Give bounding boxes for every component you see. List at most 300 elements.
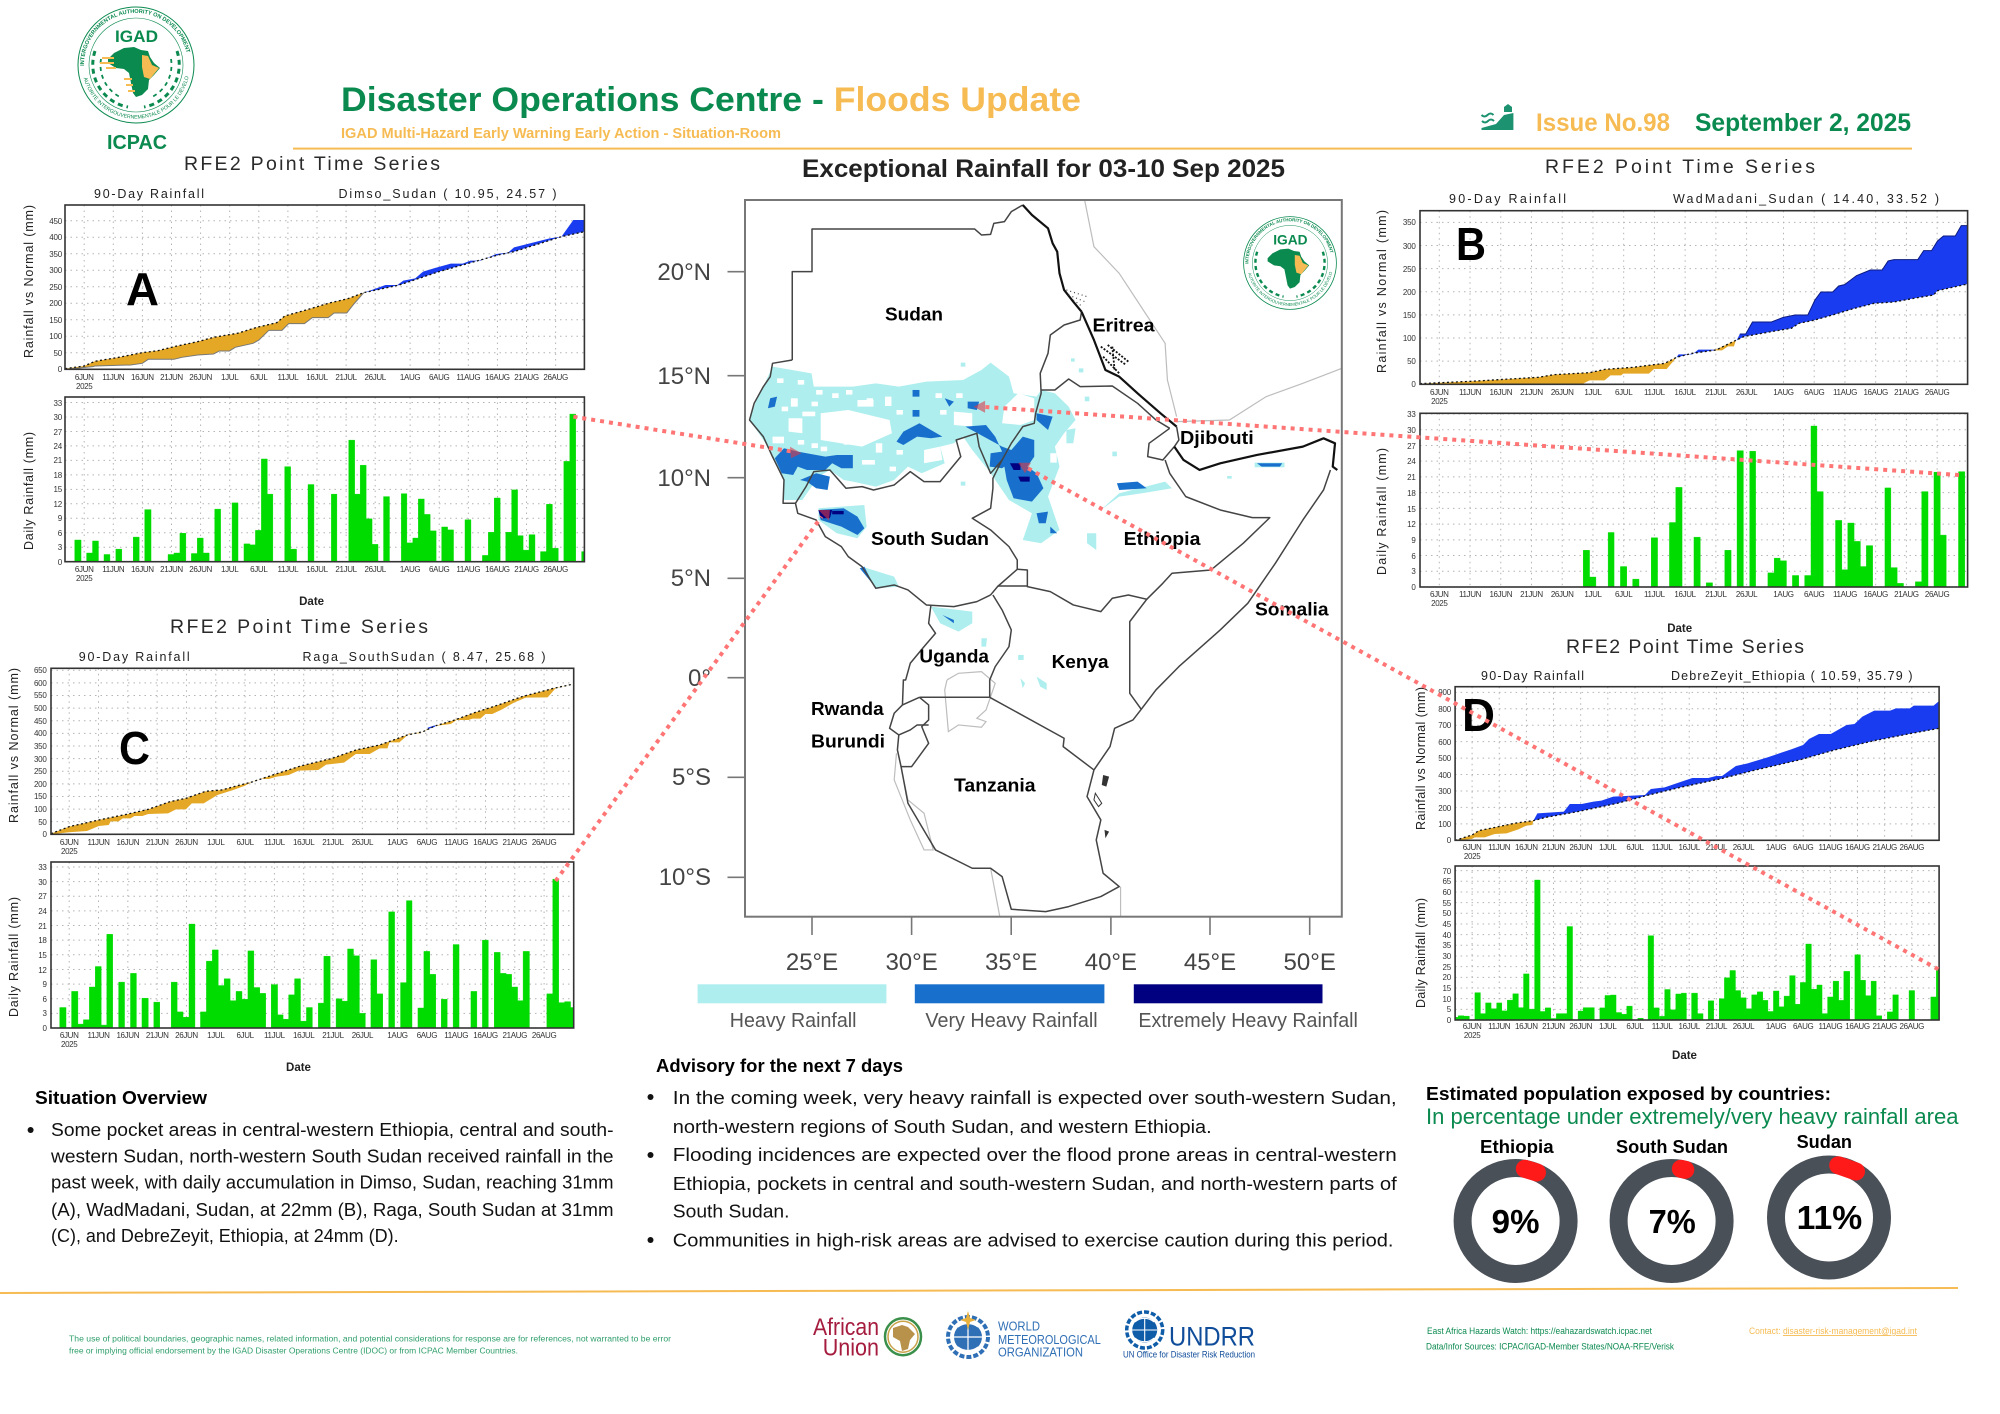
chart B axis labels: 21AUG [1894,590,1919,599]
chart B axis labels: 6JUN [1430,590,1449,599]
chart D title: RFE2 Point Time Series [1566,636,1804,658]
chart C axis labels: 250 [34,767,47,776]
chart D axis labels: 200 [1438,804,1452,813]
chart C axis labels: 16JUL [293,1031,315,1040]
chart D axis labels: 65 [1442,877,1452,886]
map country labels: Djibouti [1180,428,1254,448]
chart A axis labels: 33 [54,399,63,408]
chart D axis labels: 11JUN [1488,843,1511,852]
chart B axis labels: 200 [1403,288,1416,297]
chart A axis labels: 1JUL [221,373,239,382]
chart D axis labels: 11AUG [1818,843,1842,852]
chart B axis labels: 3 [1411,567,1416,576]
title: Disaster Operations Centre - Floods Update [341,81,1081,119]
chart B letter: B [1456,218,1486,270]
map frame and axes: 0° [688,665,711,692]
chart B axis labels: 350 [1403,218,1416,227]
chart D axis labels: 11JUL [1652,843,1673,852]
chart A axis labels: 6AUG [429,373,450,382]
icon: IGAD logo on map: IGAD [1273,233,1308,248]
chart B axis labels: 11AUG [1833,388,1857,397]
chart C axis labels: 16JUN [116,838,140,847]
chart C axis labels: 26AUG [532,838,556,847]
chart C axis labels: 12 [38,966,47,975]
chart A axis labels: 150 [49,316,63,325]
chart A axis labels: 26AUG [543,373,568,382]
chart A axis labels: 21 [54,456,63,465]
chart A axis labels: 6AUG [429,565,450,574]
chart A axis labels: 26JUN [189,373,213,382]
chart D axis labels: 6JUN [1463,843,1482,852]
map country labels: Somalia [1255,600,1330,620]
chart A axis labels: 11JUN [102,565,125,574]
chart C axis labels: 18 [38,936,47,945]
text block: advisory [648,1056,1398,1251]
chart C axis labels: 500 [34,704,47,713]
chart A axis labels: 6 [58,529,63,538]
chart C axis labels: 1AUG [387,1031,408,1040]
map legend: Heavy Rainfall [730,1010,856,1032]
chart D axis labels: 6JUL [1626,843,1645,852]
chart D axis labels: 16JUL [1679,1022,1701,1031]
chart B axis labels: 2025 [1431,397,1448,406]
chart C upper cumulative chart [51,668,574,834]
situation bullet [28,1127,34,1133]
chart C axis labels: 6AUG [417,838,437,847]
advisory heading: Advisory for the next 7 days [656,1056,903,1076]
chart B axis labels: 6AUG [1804,590,1825,599]
chart B axis labels: 26JUL [1736,388,1758,397]
chart C lower daily bars [51,862,574,1028]
chart A axis labels: 16JUL [306,565,329,574]
chart D axis labels: 500 [1438,754,1452,763]
chart B axis labels: 21AUG [1894,388,1919,397]
chart C axis labels: 11JUL [264,1031,286,1040]
chart D axis labels: 2025 [1464,852,1481,861]
chart C axis labels: 350 [34,742,47,751]
chart C axis labels: 1JUL [207,1031,225,1040]
situation text: (C), and DebreZeyit, Ethiopia, at 24mm (D). [51,1226,399,1246]
chart B axis labels: 21 [1407,473,1416,482]
situation text: Some pocket areas in central-western Ethiopia, central and south- [51,1120,614,1140]
advisory text: In the coming week, very heavy rainfall is expected over south-western Sudan, [673,1088,1397,1108]
chart B axis labels: 11JUL [1644,590,1666,599]
chart C axis labels: 2025 [61,847,78,856]
chart C axis labels: 0 [42,830,47,839]
chart A axis labels: 11AUG [456,373,480,382]
issue number: Issue No.98 [1536,109,1670,137]
chart D axis labels: 21JUL [1706,843,1728,852]
chart B axis labels: 26JUN [1551,388,1574,397]
chart C axis labels: 16JUN [116,1031,140,1040]
chart C axis labels: 100 [34,805,47,814]
map country labels: Eritrea [1092,316,1156,336]
chart B axis labels: 15 [1407,505,1416,514]
chart A axis labels: 0 [58,365,63,374]
chart B axis labels: 21JUL [1705,590,1727,599]
panel: chart B WadMadani Sudan [1375,156,1968,635]
map country labels: Burundi [811,732,885,752]
chart D axis labels: 11JUL [1652,1022,1673,1031]
chart B axis labels: 100 [1403,334,1416,343]
chart C axis labels: 26JUN [175,838,198,847]
icon: IGAD logo [78,6,194,124]
chart A lower daily bars [65,397,584,562]
header rule [293,148,1912,150]
chart C subtitle left: 90-Day Rainfall [79,650,190,664]
chart B axis labels: Date [1667,623,1692,635]
map frame and axes: 5°N [671,565,711,592]
chart A axis labels: 21JUN [160,373,183,382]
donut: Ethiopia 9%: 9% [1492,1203,1540,1240]
chart C axis labels: 27 [38,892,47,901]
chart D axis labels: 35 [1442,941,1452,950]
map frame and axes: 35°E [985,949,1037,976]
chart D axis labels: 16JUN [1515,1022,1538,1031]
chart B axis labels: 18 [1407,489,1416,498]
chart B axis labels: 250 [1403,265,1416,274]
logo: WMO [948,1311,1101,1360]
chart D axis labels: 2025 [1464,1031,1481,1040]
chart B axis labels: 16AUG [1863,388,1888,397]
chart A axis labels: 450 [49,217,63,226]
footer [0,1288,1958,1362]
chart A axis labels: 6JUN [75,373,94,382]
chart B axis labels: 0 [1411,380,1416,389]
ICPAC label: ICPAC [107,132,167,154]
chart B axis labels: 21JUN [1520,590,1543,599]
chart D axis labels: 700 [1438,721,1452,730]
chart C axis labels [7,666,556,1074]
chart D axis labels: 6AUG [1793,843,1814,852]
data sources: Data/Infor Sources: ICPAC/IGAD-Member States/NOAA-RFE/Verisk [1426,1342,1674,1352]
map frame and axes: 30°E [885,949,938,976]
chart B axis labels: 33 [1407,410,1416,419]
chart D axis labels: 0 [1447,1016,1452,1025]
chart A axis labels: 21JUN [160,565,183,574]
chart A axis labels: Rainfall vs Normal (mm) [22,205,36,358]
data sources: East Africa Hazards Watch: https://eahazardswatch.icpac.net [1427,1326,1652,1336]
chart D axis labels: 30 [1442,952,1452,961]
chart C axis labels: 0 [42,1024,47,1033]
chart C axis labels: 50 [38,818,47,827]
map frame and axes: 25°E [786,949,838,976]
chart B axis labels [1375,210,1949,635]
chart D axis labels: 1AUG [1766,843,1786,852]
chart D axis labels: 1JUL [1599,843,1617,852]
map country labels [811,305,1330,796]
chart D axis labels: 40 [1442,931,1452,940]
chart B axis labels: 16JUN [1489,388,1513,397]
chart A axis labels: 0 [58,558,63,567]
chart D axis labels: 900 [1438,688,1452,697]
chart A axis labels: 2025 [76,382,93,391]
chart B axis labels: 6AUG [1804,388,1825,397]
chart C axis labels: 400 [34,729,47,738]
donut: Ethiopia 9%: Ethiopia [1480,1137,1555,1157]
situation text: past week, with daily accumulation in Dimso, Sudan, reaching 31mm [51,1173,614,1193]
chart A axis labels: Daily Rainfall (mm) [22,432,36,550]
chart D axis labels: Daily Rainfall (mm) [1414,898,1428,1008]
text block: situation overview [28,1088,614,1246]
chart C axis labels: 16AUG [473,838,498,847]
logo: WMO: METEOROLOGICAL [998,1333,1101,1347]
chart B axis labels: Daily Rainfall (mm) [1375,448,1389,575]
chart B axis labels: 50 [1407,357,1416,366]
chart C axis labels: 16JUL [293,838,315,847]
chart C axis labels: Daily Rainfall (mm) [7,897,21,1017]
disclaimer: free or implying official endorsement by the IGAD Disaster Operations Centre (IDOC) or from ICPAC Member Countries. [69,1346,518,1356]
chart A axis labels: 21JUL [335,565,358,574]
chart C axis labels: 21AUG [503,1031,527,1040]
chart A axis labels: 26AUG [543,565,568,574]
chart D lower daily bars [1455,866,1939,1020]
map frame and axes: 50°E [1284,949,1336,976]
chart C axis labels: 26AUG [532,1031,556,1040]
chart D station: DebreZeyit_Ethiopia ( 10.59, 35.79 ) [1671,669,1913,683]
chart C axis labels: 3 [42,1009,47,1018]
chart D axis labels: 21AUG [1872,1022,1897,1031]
chart B axis labels: 2025 [1431,599,1448,608]
panel: chart D DebreZeyit Ethiopia [1414,636,1939,1062]
chart B station: WadMadani_Sudan ( 14.40, 33.52 ) [1673,192,1939,206]
chart B axis labels: 6 [1411,552,1416,561]
chart D axis labels: 16AUG [1845,843,1870,852]
donut: South Sudan 7% [1616,1137,1728,1274]
map frame and axes: 5°S [672,764,711,791]
map frame and axes: 15°N [657,363,711,390]
chart A axis labels: 11JUL [278,565,299,574]
chart A axis labels: 350 [49,250,63,259]
population subheading: In percentage under extremely/very heavy rainfall area [1426,1104,1959,1129]
chart D axis labels: 1JUL [1599,1022,1617,1031]
chart B axis labels: 1AUG [1773,590,1794,599]
chart B axis labels: 1JUL [1584,590,1603,599]
chart D axis labels [1414,687,1924,1062]
chart D axis labels: 26AUG [1900,843,1924,852]
map country labels: Uganda [919,647,990,667]
chart B axis labels: 30 [1407,426,1416,435]
chart C axis labels: 24 [38,907,47,916]
chart C station: Raga_SouthSudan ( 8.47, 25.68 ) [302,650,546,664]
chart B axis labels: 6JUL [1615,590,1633,599]
subtitle: IGAD Multi-Hazard Early Warning Early Action - Situation-Room [341,126,781,142]
chart B lower daily bars [1420,413,1968,587]
logo: African Union [813,1314,921,1362]
map frame and axes: 10°N [657,465,711,492]
panel: rainfall map [640,155,1358,1032]
chart C axis labels: 6AUG [417,1031,437,1040]
chart A axis labels: 400 [49,233,63,242]
chart A axis labels: 26JUN [189,565,213,574]
chart B axis labels: 11AUG [1833,590,1857,599]
chart D axis labels: 800 [1438,705,1452,714]
donut: South Sudan 7%: 7% [1649,1203,1696,1240]
chart B axis labels: 24 [1407,457,1416,466]
chart A axis labels: 16JUL [306,373,329,382]
chart C axis labels: 6JUL [236,1031,255,1040]
logo: African Union: Union [823,1335,879,1362]
chart A axis labels: 1AUG [400,565,420,574]
chart C axis labels: 21JUN [146,838,169,847]
chart C axis labels: 6JUN [60,838,79,847]
chart A axis labels: 27 [54,428,63,437]
advisory text: Communities in high-risk areas are advised to exercise caution during this period. [673,1231,1394,1251]
chart C axis labels: 21AUG [503,838,527,847]
chart B axis labels: 16AUG [1863,590,1888,599]
chart B axis labels: 26JUN [1551,590,1574,599]
chart D axis labels: 25 [1442,963,1452,972]
chart C axis labels: 11JUL [264,838,286,847]
chart C letter: C [119,722,150,774]
chart A axis labels: 6JUL [250,565,268,574]
disclaimer: The use of political boundaries, geographic names, related information, and potential considerations for response are for references, not warranted to be error [69,1334,671,1344]
chart D axis labels: 50 [1442,909,1452,918]
chart A axis labels: 50 [54,349,63,358]
chart B axis labels: 26JUL [1736,590,1758,599]
chart D axis labels: 100 [1438,820,1452,829]
logo: African Union: African [813,1314,879,1341]
chart D axis labels: 5 [1447,1005,1452,1014]
rainfall shading [750,358,1285,690]
chart B axis labels: 16JUL [1674,590,1697,599]
chart D axis labels: Rainfall vs Normal (mm) [1414,687,1428,830]
donut: Sudan 11% [1776,1132,1882,1270]
chart A axis labels: 12 [54,500,63,509]
chart B axis labels: 12 [1407,520,1416,529]
chart D axis labels: 16AUG [1845,1022,1870,1031]
chart A axis labels: 21JUL [335,373,358,382]
chart C axis labels: Rainfall vs Normal (mm) [7,668,21,823]
chart A axis labels [22,205,568,608]
chart B axis labels: 1JUL [1584,388,1603,397]
map frame and axes: 40°E [1085,949,1137,976]
logo: UNDRR: UNDRR [1169,1322,1255,1352]
chart A axis labels: 24 [54,442,63,451]
chart C axis labels: 21JUL [322,838,345,847]
chart A axis labels: 21AUG [514,565,539,574]
chart A axis labels: 1AUG [400,373,420,382]
chart D axis labels: 21JUN [1542,843,1565,852]
chart D axis labels: 55 [1442,899,1452,908]
chart C axis labels: 300 [34,755,47,764]
chart D upper cumulative chart [1455,687,1939,840]
chart C axis labels: 550 [34,691,47,700]
chart D axis labels: 1AUG [1766,1022,1786,1031]
chart D axis labels: 20 [1442,973,1452,982]
situation text [50,1120,614,1246]
chart C axis labels: 21 [38,922,47,931]
contact: Contact: disaster-risk-management@igad.int [1749,1326,1917,1336]
chart D axis labels: 6JUN [1463,1022,1482,1031]
donut: South Sudan 7%: South Sudan [1616,1137,1728,1157]
chart B axis labels: 21JUL [1705,388,1727,397]
chart D axis labels: 11AUG [1818,1022,1842,1031]
chart D axis labels: 70 [1442,867,1452,876]
chart D axis labels: 6AUG [1793,1022,1814,1031]
panel: population exposed [1426,1084,1959,1274]
date: September 2, 2025 [1695,109,1911,137]
chart D axis labels: 6JUL [1626,1022,1645,1031]
chart A axis labels: 21AUG [514,373,539,382]
map country labels: Rwanda [811,699,885,719]
chart C axis labels: 150 [34,792,47,801]
disclaimer [69,1334,671,1356]
chart B title: RFE2 Point Time Series [1545,156,1815,178]
chart B axis labels: 16JUL [1674,388,1697,397]
connector: chart B to map [974,401,1959,475]
chart B axis labels: 1AUG [1773,388,1794,397]
map frame and axes: 45°E [1184,949,1236,976]
icon: IGAD logo on map [1243,216,1337,310]
chart C axis labels: 600 [34,679,47,688]
chart A subtitle left: 90-Day Rainfall [94,187,204,201]
advisory text: South Sudan. [673,1202,790,1222]
chart C title: RFE2 Point Time Series [170,616,428,638]
chart D axis labels: 21JUL [1706,1022,1728,1031]
map country labels: Tanzania [954,776,1037,796]
advisory text: Flooding incidences are expected over the flood prone areas in central-western [673,1145,1397,1165]
chart A axis labels: 26JUL [365,373,387,382]
map legend: Extremely Heavy Rainfall [1138,1010,1358,1032]
chart B axis labels: 300 [1403,242,1416,251]
chart A axis labels: 300 [49,266,63,275]
chart B axis labels: 26AUG [1925,590,1949,599]
logo: UNDRR [1123,1312,1255,1361]
situation heading: Situation Overview [35,1088,208,1108]
chart C axis labels: 21JUL [322,1031,345,1040]
chart D axis labels: 26AUG [1900,1022,1924,1031]
chart A axis labels: 26JUL [365,565,387,574]
chart D axis labels: 600 [1438,738,1452,747]
map country labels: South Sudan [871,529,989,549]
chart C axis labels: 26JUL [352,1031,374,1040]
chart B axis labels: 26AUG [1925,388,1949,397]
chart A axis labels: 16JUN [131,565,154,574]
chart A axis labels: 16JUN [131,373,154,382]
chart D axis labels: Date [1672,1050,1697,1062]
icon: IGAD logo: AUTORITÉ INTERGOUVERNEMENTALE POUR LE DÉVELOPPEMENT [84,76,188,119]
chart B axis labels: 27 [1407,442,1416,451]
icon: IGAD logo on map: INTERGOVERNMENTAL AUTHORITY ON DEVELOPMENT [1245,218,1334,264]
chart A axis labels: 2025 [76,574,93,583]
map legend: Very Heavy Rainfall [925,1010,1098,1032]
chart D axis labels: 0 [1447,836,1452,845]
chart D axis labels: 21JUN [1542,1022,1565,1031]
situation text: western Sudan, north-western South Sudan received rainfall in the [50,1147,613,1167]
panel: chart A Dimso Sudan [22,153,584,608]
chart B axis labels: 11JUN [1459,590,1482,599]
chart A axis labels: 16AUG [485,373,510,382]
chart C axis labels: 33 [38,863,47,872]
chart B axis labels: 6JUN [1430,388,1449,397]
chart A letter: A [126,263,159,315]
connector: chart D to map [1018,463,1938,969]
chart C axis labels: 30 [38,878,47,887]
chart D axis labels: 10 [1442,995,1452,1004]
logo: WMO: ORGANIZATION [998,1346,1083,1360]
chart A axis labels: 16AUG [485,565,510,574]
panel: chart C Raga South Sudan [7,616,574,1074]
chart C axis labels: 11AUG [444,1031,468,1040]
chart C axis labels: 6JUN [60,1031,79,1040]
chart B axis labels: 0 [1411,583,1416,592]
chart C axis labels: 200 [34,780,47,789]
chart B axis labels: 11JUL [1644,388,1666,397]
chart C axis labels: 26JUL [352,838,374,847]
map frame and axes [657,200,1342,976]
chart A axis labels: 1JUL [221,565,239,574]
